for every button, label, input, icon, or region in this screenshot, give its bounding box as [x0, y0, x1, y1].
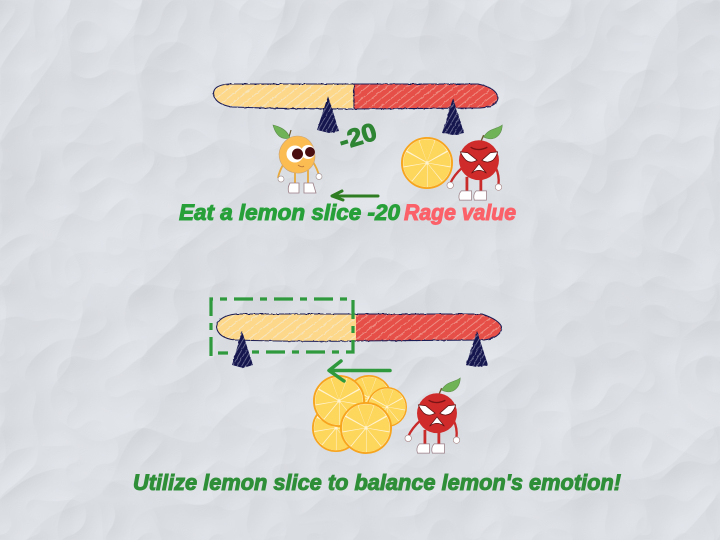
top right pivot	[442, 98, 464, 135]
lemon slice	[402, 138, 452, 188]
angry apple character	[447, 125, 502, 200]
caption: eat a lemon slice: Eat a lemon slice -20	[179, 200, 401, 225]
top arrow	[332, 191, 378, 200]
angry apple character, lower	[405, 378, 460, 453]
caption: utilize lemon slice: Utilize lemon slice to balance lemon's emotion!	[133, 470, 621, 495]
lemon character	[273, 125, 322, 193]
bottom balance bar	[216, 314, 502, 341]
lemon slice pile	[313, 376, 406, 453]
top left pivot	[317, 96, 339, 133]
top balance bar	[214, 84, 498, 109]
minus twenty label: -20	[336, 118, 380, 156]
bottom right pivot	[466, 331, 488, 367]
caption: rage value: Rage value	[404, 200, 516, 225]
bottom arrow	[329, 361, 390, 381]
dashed highlight box	[211, 299, 353, 356]
bottom left pivot	[232, 331, 253, 368]
